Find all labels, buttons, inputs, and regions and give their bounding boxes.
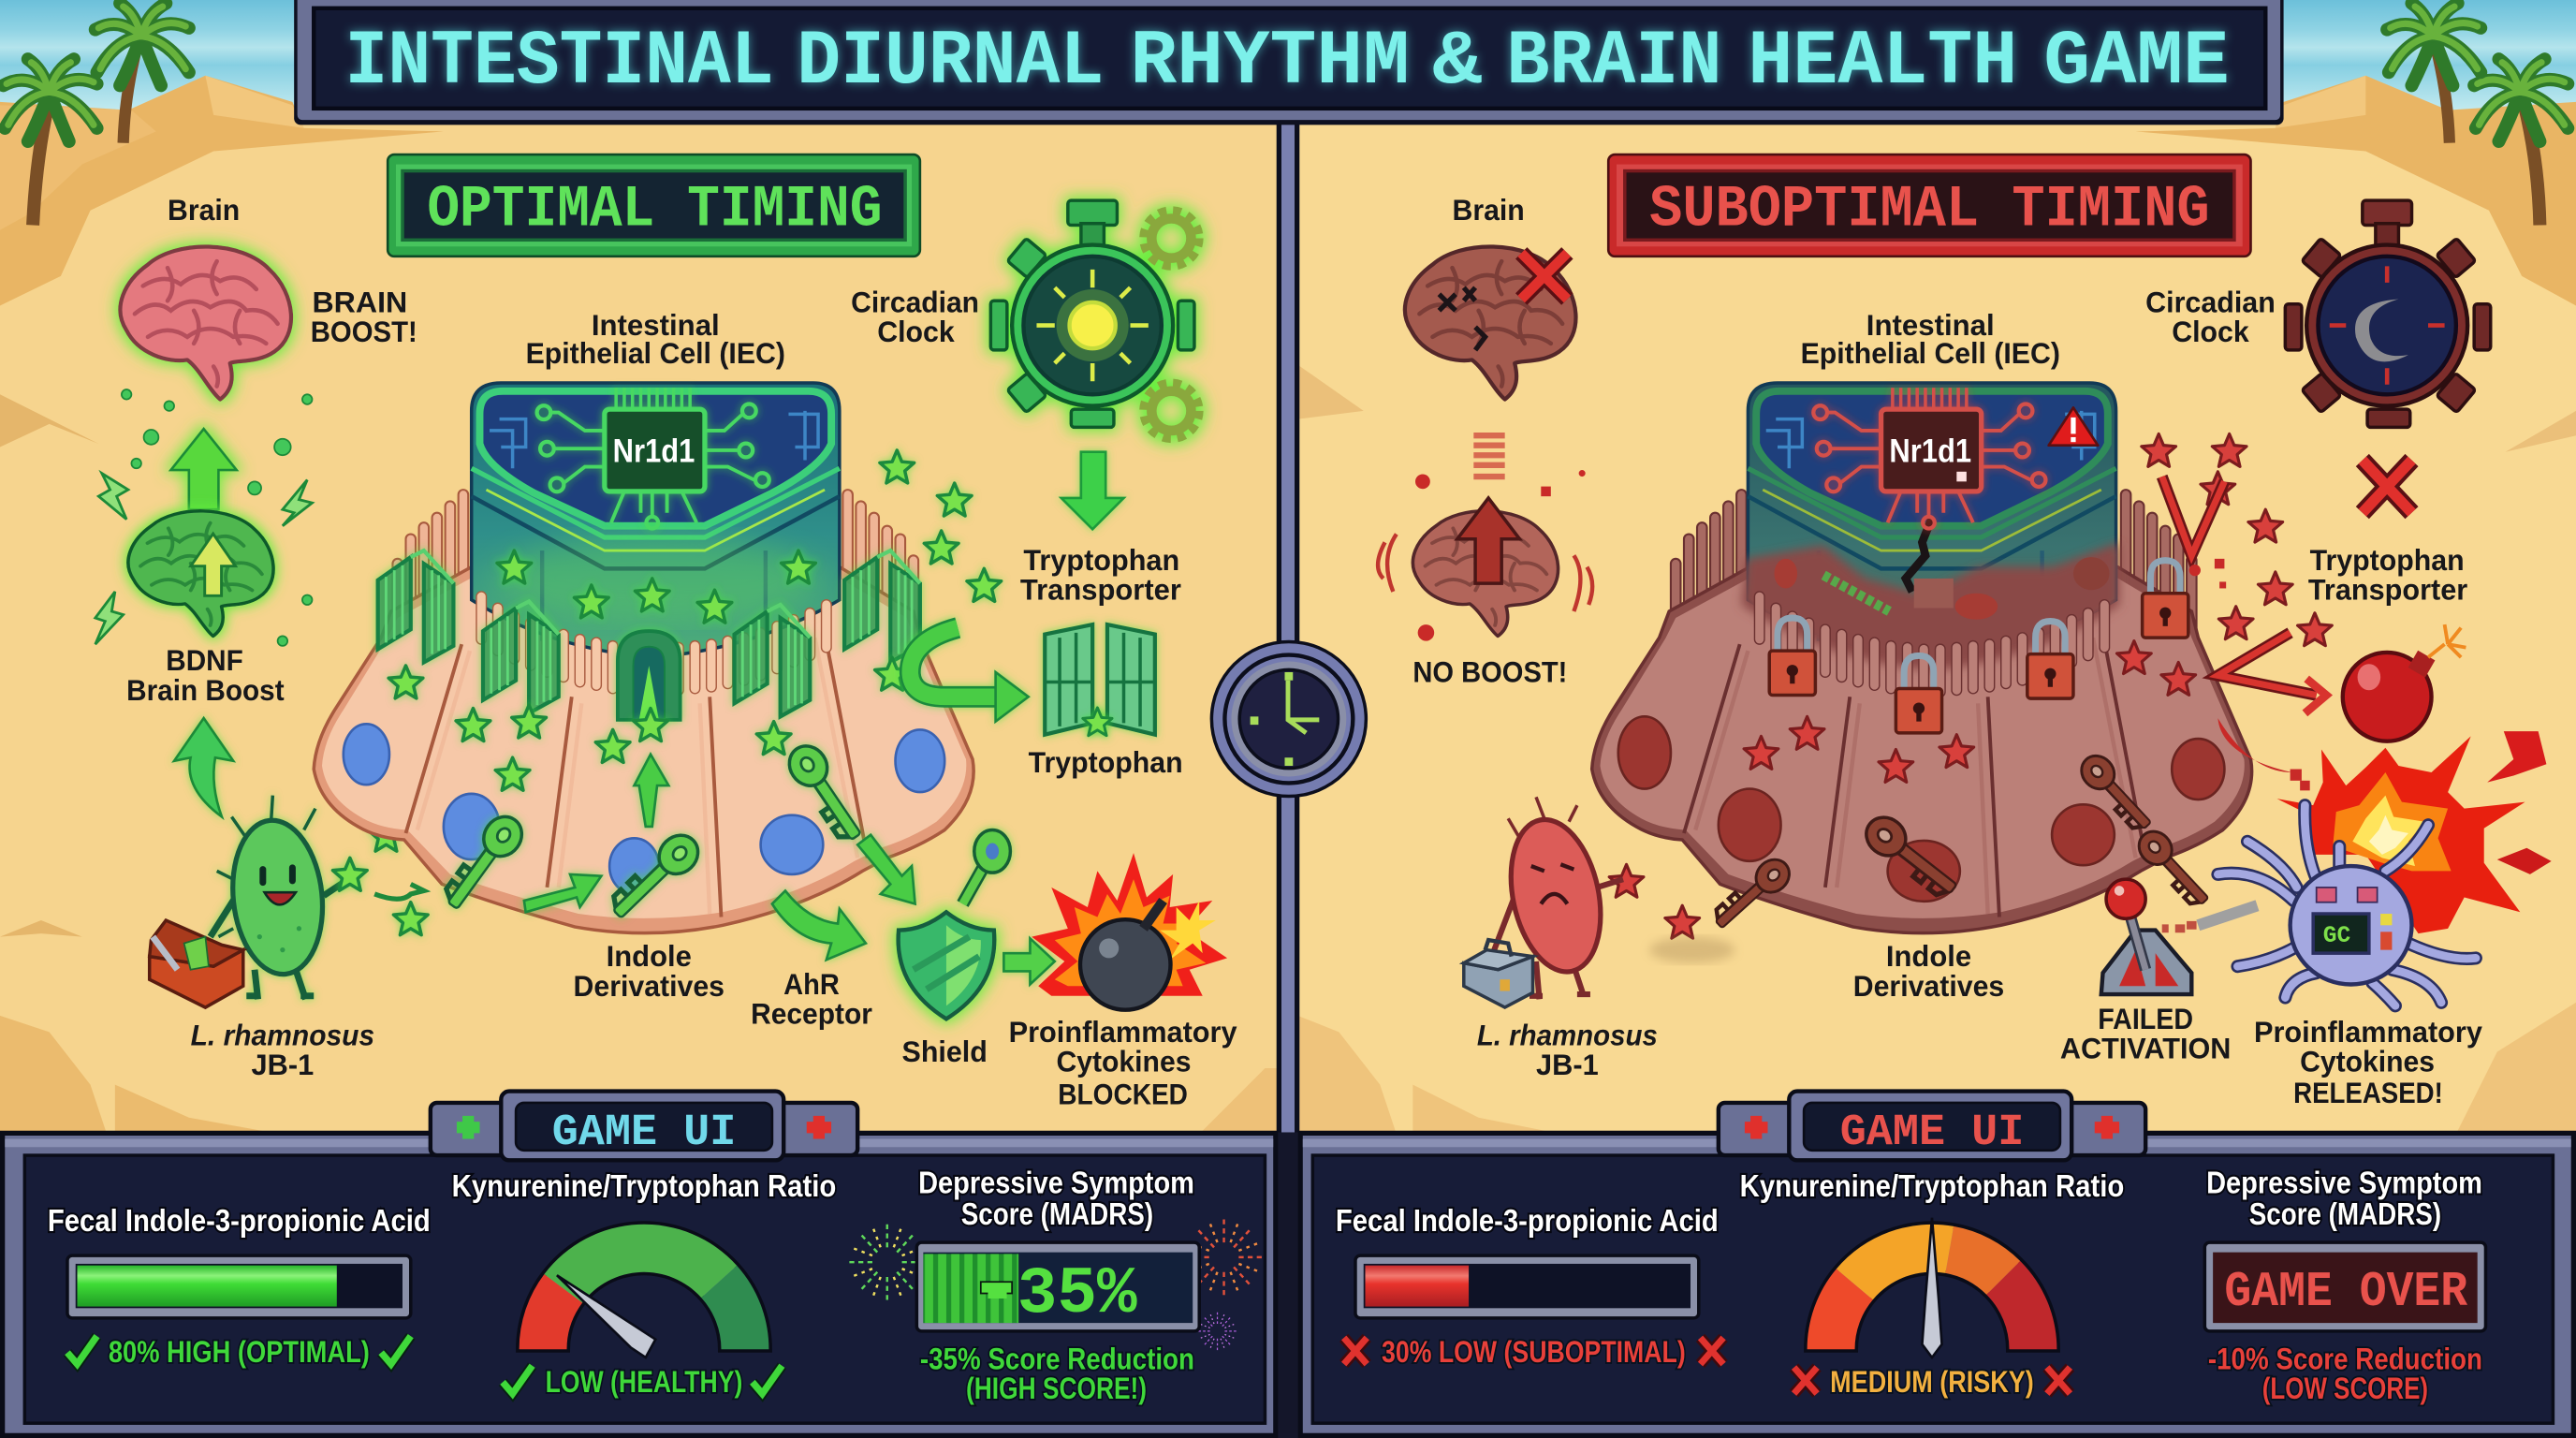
tab label: GAME UI: [552, 1108, 736, 1158]
label: intestinal epithelial cell: [1801, 308, 2060, 370]
icon: circadian clock with sun: [990, 200, 1199, 439]
fireworks: [846, 1216, 1265, 1352]
nuclei: [1618, 716, 2224, 902]
label: indole derivatives: Indole: [607, 939, 692, 973]
label: BDNF brain boost: [126, 643, 285, 707]
icon: red toolbox: [150, 920, 243, 1007]
indole keys: [438, 739, 1010, 927]
metric: kynurenine gauge right: Kynurenine/Tryptophan Ratio: [1740, 1169, 2124, 1204]
icon: gray toolbox: [1464, 940, 1533, 1007]
label: indole derivatives: [1853, 939, 2004, 1003]
title: RHYTHM: [1131, 18, 1410, 106]
panel: game UI dashboard base: [0, 1131, 2576, 1438]
status: 30% LOW (SUBOPTIMAL): [1382, 1335, 1686, 1369]
label: tryptophan transporter: [1020, 543, 1181, 607]
palm trees left: [4, 4, 189, 225]
bar: [67, 1255, 411, 1318]
icon: red x on brain: [1521, 253, 1567, 299]
label: circadian clock: Circadian: [851, 286, 979, 319]
icon: explosion behind cytokine: [2277, 731, 2552, 933]
title banner: [294, 0, 2284, 125]
icon: explosion and bomb blocked: [1032, 853, 1227, 1010]
icon: red bomb: [2343, 624, 2466, 741]
title: [345, 18, 2230, 106]
label: AhR receptor: Receptor: [751, 997, 872, 1031]
metric: kynurenine gauge left: [452, 1169, 836, 1399]
rusty keys: [1708, 749, 2217, 936]
dunes: [0, 76, 2576, 1134]
label: circadian clock: Clock: [2172, 315, 2249, 348]
label: circadian clock: [851, 286, 979, 348]
label: failed activation: [2060, 1002, 2231, 1064]
icon: red x stroke: [1521, 253, 1567, 299]
locks: [1769, 561, 2188, 733]
icon: joystick failed activation: [2101, 879, 2191, 994]
metric: depressive score left: [846, 1166, 1265, 1405]
stars near bacterium: [332, 818, 428, 935]
warning sign: [2049, 407, 2098, 446]
title: BRAIN: [1506, 18, 1721, 106]
arrows: failed deflected: [2162, 477, 2317, 696]
label: brain boost: [311, 286, 417, 348]
label: cytokines blocked: Proinflammatory: [1009, 1015, 1237, 1049]
label: circadian clock: Clock: [877, 315, 955, 348]
heading: optimal timing: OPTIMAL TIMING: [427, 175, 882, 242]
status: 80% HIGH (OPTIMAL): [109, 1335, 370, 1369]
metric: fecal indole left: [48, 1204, 431, 1369]
icon: BDNF green brain: [128, 511, 273, 636]
tryptophan stars: [388, 450, 1002, 790]
damage band: [1741, 542, 2119, 670]
chip error mark: [1956, 472, 1967, 481]
label: BDNF brain boost: Brain Boost: [126, 673, 285, 707]
particles and bolts: [95, 389, 312, 646]
gears: [1144, 211, 1199, 439]
smoke trail: [2162, 905, 2258, 929]
arrow: small stars flow: [374, 884, 424, 899]
label: intestinal epithelial cell: Intestinal: [592, 308, 720, 342]
label: tryptophan transporter: Tryptophan: [2310, 543, 2465, 577]
screen text: GC: [2323, 924, 2350, 949]
status: [2208, 1342, 2482, 1405]
damage details: [1775, 518, 2110, 620]
panel: optimal timing: [95, 154, 1237, 1111]
nuclei: [344, 724, 944, 894]
label: tryptophan transporter: Transporter: [2308, 573, 2467, 607]
label: cytokines blocked: BLOCKED: [1058, 1078, 1188, 1111]
arrows: failed deflected fill: [2162, 477, 2326, 713]
arrows: indole pathway: [524, 628, 1029, 960]
score box: [916, 1242, 1199, 1332]
label: brain boost: BRAIN: [312, 286, 407, 319]
score box: [2204, 1242, 2485, 1331]
icon: damaged brain: [1405, 246, 1575, 400]
buttons on cytokine: [2380, 914, 2392, 950]
metric: fecal indole right: [1336, 1204, 1723, 1369]
label: indole derivatives: [574, 939, 724, 1003]
label: indole derivatives: Indole: [1886, 939, 1971, 973]
label: AhR receptor: AhR: [783, 967, 840, 1001]
metric: depressive score left: Depressive Symptom: [918, 1166, 1194, 1200]
score box: -35%: [977, 1258, 1137, 1332]
label: intestinal epithelial cell: Epithelial Cell (IEC): [1801, 336, 2060, 370]
gauge: [520, 1225, 768, 1357]
label: no boost: NO BOOST!: [1412, 655, 1567, 689]
label: cytokines released: RELEASED!: [2293, 1076, 2443, 1109]
label: indole derivatives: Derivatives: [574, 969, 724, 1003]
label: failed activation: ACTIVATION: [2060, 1031, 2231, 1064]
sky: [0, 0, 2576, 118]
palm trees right: [2387, 4, 2568, 225]
label: brain: Brain: [1453, 193, 1525, 227]
icon: healthy brain: [120, 246, 291, 400]
chip label: Nr1d1: [1889, 433, 1971, 469]
icon: central clock: [1210, 640, 1368, 798]
label: brain: Brain: [168, 193, 240, 227]
heading: suboptimal timing: SUBOPTIMAL TIMING: [1649, 175, 2210, 242]
label: cytokines blocked: [1009, 1015, 1237, 1111]
label: BDNF brain boost: BDNF: [166, 643, 243, 677]
label: shield: Shield: [902, 1034, 988, 1068]
status: MEDIUM (RISKY): [1830, 1365, 2034, 1399]
label: L. rhamnosus JB-1: L. rhamnosus: [191, 1018, 374, 1051]
Nr1d1 chip: [537, 388, 769, 529]
heading: optimal timing: [388, 154, 920, 257]
label: L. rhamnosus JB-1: JB-1: [1536, 1048, 1599, 1081]
icon: L. rhamnosus bacterium: [211, 796, 348, 999]
title: INTESTINAL: [345, 18, 774, 106]
label: L. rhamnosus JB-1: [191, 1018, 374, 1081]
label: failed activation: FAILED: [2098, 1002, 2193, 1035]
icon: circadian clock with moon: [2285, 200, 2491, 427]
game UI tab right: [1719, 1092, 2145, 1160]
status: [920, 1342, 1194, 1405]
label: cytokines released: Proinflammatory: [2254, 1015, 2482, 1049]
metric: depressive score right: [2204, 1166, 2485, 1405]
chip: [1813, 388, 2045, 529]
icon: weak brain with stalled arrow: [1378, 435, 1592, 641]
tab label: GAME UI: [1840, 1108, 2024, 1158]
label: brain boost: BOOST!: [311, 315, 417, 348]
shadow near star: [1649, 937, 1734, 963]
icon: red x stroke: [2363, 461, 2411, 513]
arrow: bacterium to BDNF: [174, 718, 233, 816]
label: tryptophan transporter: Transporter: [1020, 573, 1181, 607]
title: DIURNAL: [797, 18, 1104, 106]
transporter gates: [378, 550, 920, 720]
status: (LOW SCORE): [2262, 1372, 2428, 1405]
icon: red x blocked transport: [2363, 461, 2411, 513]
metric: depressive score right: Depressive Symptom: [2206, 1166, 2482, 1200]
title: &: [1432, 18, 1483, 106]
label: L. rhamnosus JB-1: L. rhamnosus: [1477, 1018, 1658, 1051]
label: intestinal epithelial cell: [526, 308, 785, 370]
metric: kynurenine gauge left: Kynurenine/Tryptophan Ratio: [452, 1169, 836, 1204]
label: tryptophan: Tryptophan: [1029, 745, 1183, 779]
metric: kynurenine gauge right: [1740, 1169, 2124, 1399]
label: intestinal epithelial cell: Intestinal: [1866, 308, 1995, 342]
chip label: Nr1d1: [613, 433, 695, 469]
center divider: [1277, 115, 1299, 1151]
label: circadian clock: [2145, 286, 2276, 348]
label: tryptophan transporter: [2308, 543, 2467, 607]
label: circadian clock: Circadian: [2145, 286, 2276, 319]
label: intestinal epithelial cell: Epithelial Cell (IEC): [526, 336, 785, 370]
icon: proinflammatory cytokine virus: [2217, 805, 2476, 1005]
metric: fecal indole left: Fecal Indole-3-propionic Acid: [48, 1204, 431, 1239]
red spatter: [2189, 559, 2310, 790]
metric: depressive score left: Score (MADRS): [961, 1197, 1153, 1232]
title: HEALTH: [1748, 18, 2017, 106]
metric: fecal indole right: Fecal Indole-3-propionic Acid: [1336, 1204, 1719, 1239]
heading: suboptimal timing: [1608, 154, 2250, 257]
status: -10% Score Reduction: [2208, 1342, 2482, 1375]
label: AhR receptor: [751, 967, 872, 1031]
diagram: intestinal epithelial cell optimal: [314, 383, 973, 933]
gauge: [1808, 1218, 2056, 1357]
title: GAME: [2043, 18, 2230, 106]
label: L. rhamnosus JB-1: JB-1: [252, 1048, 314, 1081]
label: tryptophan transporter: Tryptophan: [1023, 543, 1179, 577]
label: cytokines released: [2254, 1015, 2482, 1109]
bar: [1355, 1255, 1699, 1318]
icon: shield: [899, 912, 994, 1019]
red stars: [1609, 433, 2332, 938]
icon: transporter door: [1045, 624, 1155, 736]
label: cytokines released: Cytokines: [2300, 1045, 2435, 1078]
arrow: brain boost up: [171, 429, 237, 509]
label: cytokines blocked: Cytokines: [1057, 1045, 1191, 1078]
label: L. rhamnosus JB-1: [1477, 1018, 1658, 1081]
icon: sad bacterium: [1492, 797, 1623, 999]
diagram: intestinal epithelial cell suboptimal: [1592, 383, 2252, 933]
arrow: clock to transporter: [1061, 452, 1123, 529]
arrow: shield to bomb: [1003, 938, 1055, 985]
score box: GAME OVER: [2224, 1264, 2468, 1320]
label: indole derivatives: Derivatives: [1853, 969, 2004, 1003]
metric: depressive score right: Score (MADRS): [2249, 1197, 2441, 1232]
game UI tab left: [431, 1092, 857, 1160]
status: -35% Score Reduction: [920, 1342, 1194, 1375]
status: LOW (HEALTHY): [546, 1365, 742, 1399]
status: (HIGH SCORE!): [966, 1372, 1147, 1405]
